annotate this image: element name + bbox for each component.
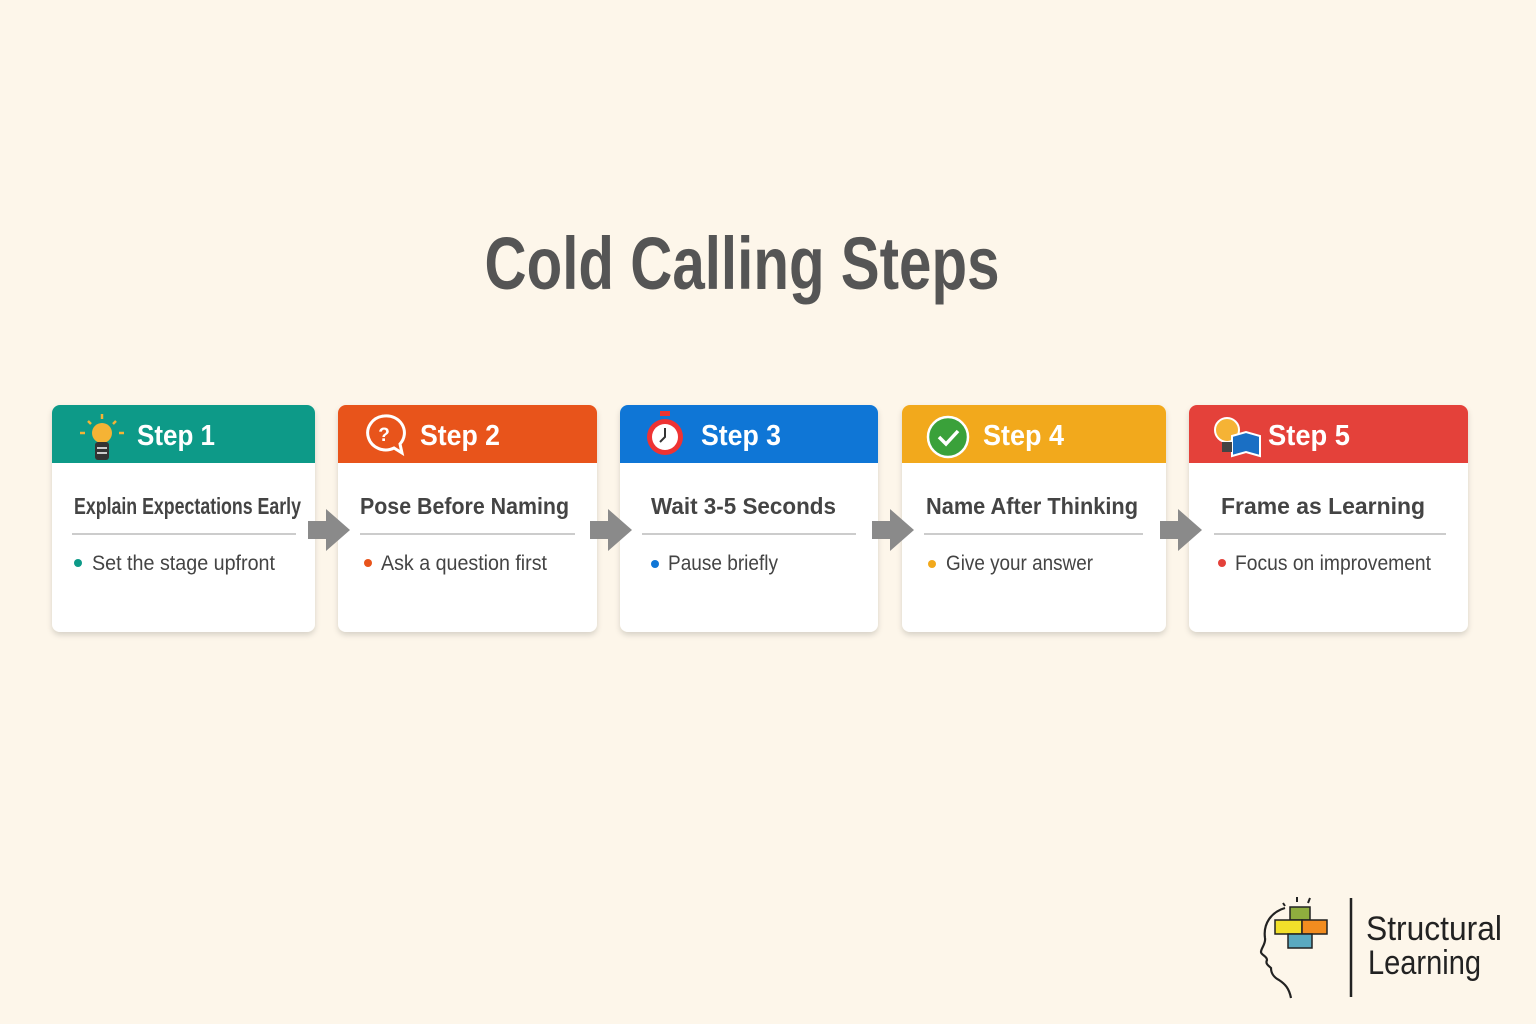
card: step 3: Step 3	[701, 420, 781, 452]
card: step 5: Frame as Learning	[1221, 493, 1425, 519]
card: step 2: Pose Before Naming	[360, 493, 569, 519]
card: step 4: Step 4	[983, 420, 1064, 452]
card: step 2: Step 2	[420, 420, 500, 452]
card: step 3: Pause briefly	[668, 552, 778, 575]
card: step 1: Explain Expectations Early	[74, 493, 301, 519]
card: step 2	[338, 405, 597, 632]
card: step 2: Ask a question first	[381, 552, 547, 575]
icon: bulb and book	[1215, 418, 1260, 456]
card: step 5: Focus on improvement	[1235, 552, 1431, 575]
card: step 5	[1189, 405, 1468, 632]
arrow 2	[590, 509, 632, 551]
title: Cold Calling Steps	[484, 222, 1000, 305]
card: step 1	[52, 405, 315, 632]
icon: light bulb	[80, 414, 124, 460]
card: step 4: Name After Thinking	[926, 493, 1138, 519]
arrow 4	[1160, 509, 1202, 551]
logo: Structural Learning: Learning	[1368, 944, 1481, 982]
logo: Structural Learning: Structural	[1366, 910, 1502, 948]
card: step 5: Step 5	[1268, 420, 1350, 452]
icon: check circle	[928, 417, 968, 457]
card: step 4: Give your answer	[946, 552, 1093, 575]
icon: question bubble: ?	[378, 425, 390, 446]
arrow 3	[872, 509, 914, 551]
icon: question bubble	[368, 416, 404, 453]
logo: Structural Learning	[1261, 897, 1502, 998]
icon: stopwatch	[647, 411, 683, 455]
card: step 3	[620, 405, 878, 632]
card: step 1: Set the stage upfront	[92, 552, 275, 575]
card: step 4	[902, 405, 1166, 632]
card: step 3: Wait 3-5 Seconds	[651, 493, 836, 519]
arrow 1	[308, 509, 350, 551]
card: step 1: Step 1	[137, 420, 215, 452]
